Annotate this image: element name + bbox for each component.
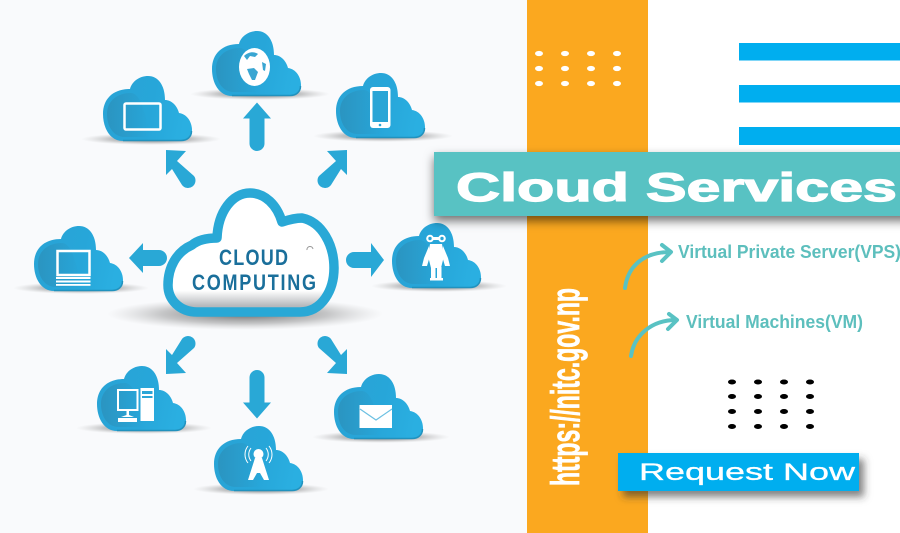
- left background panel: [0, 0, 527, 533]
- vertical url: https://nitc.gov.np: [544, 288, 588, 486]
- cloud: robot: [371, 223, 507, 292]
- cloud: wireless tower: [193, 426, 329, 495]
- cloud: email: [312, 374, 450, 443]
- icon: tablet: [124, 104, 160, 130]
- icon: smartphone: [370, 87, 390, 128]
- central cloud label: cloud: CLOUD: [219, 246, 289, 270]
- black dot grid: [728, 380, 814, 429]
- icon: desktop computer: [118, 388, 154, 422]
- small arc mark: [307, 246, 313, 250]
- cloud: smartphone: [313, 73, 453, 142]
- curved arrow: vps: [625, 245, 671, 288]
- title banner: [434, 152, 900, 216]
- request now button: [618, 453, 859, 491]
- arrow: upper left: [166, 150, 196, 188]
- icon: wireless tower: [245, 446, 272, 480]
- arrow: up: [243, 102, 271, 151]
- decorative stripes: [739, 43, 900, 145]
- arrow: right: [346, 243, 384, 277]
- central cloud: cloud computing: [168, 193, 334, 312]
- cloud: laptop: [13, 226, 149, 294]
- icon: laptop: [56, 251, 90, 286]
- curved arrow: vm: [631, 314, 677, 356]
- title text: Cloud Services: [456, 166, 897, 210]
- arrow: lower right: [318, 336, 347, 374]
- orange vertical band: [527, 0, 648, 533]
- arrow: left: [129, 243, 167, 273]
- arrow: lower left: [166, 336, 196, 374]
- white dot grid: [535, 51, 621, 86]
- icon: envelope: [360, 405, 392, 428]
- arrow: upper right: [318, 150, 347, 188]
- service: virtual machines: Virtual Machines(VM): [686, 312, 863, 332]
- white right panel: [648, 0, 900, 533]
- arrow: down: [243, 370, 271, 418]
- cloud computing diagram: [13, 31, 507, 495]
- icon: globe: [239, 48, 270, 86]
- central cloud label: computing: COMPUTING: [192, 271, 318, 295]
- cloud: tablet: [81, 76, 221, 145]
- icon: robot: [422, 235, 450, 280]
- central cloud shadow: [107, 298, 383, 330]
- cloud: desktop computer: [76, 366, 212, 434]
- button label: Request Now: [639, 459, 856, 486]
- cloud: globe: [190, 31, 330, 100]
